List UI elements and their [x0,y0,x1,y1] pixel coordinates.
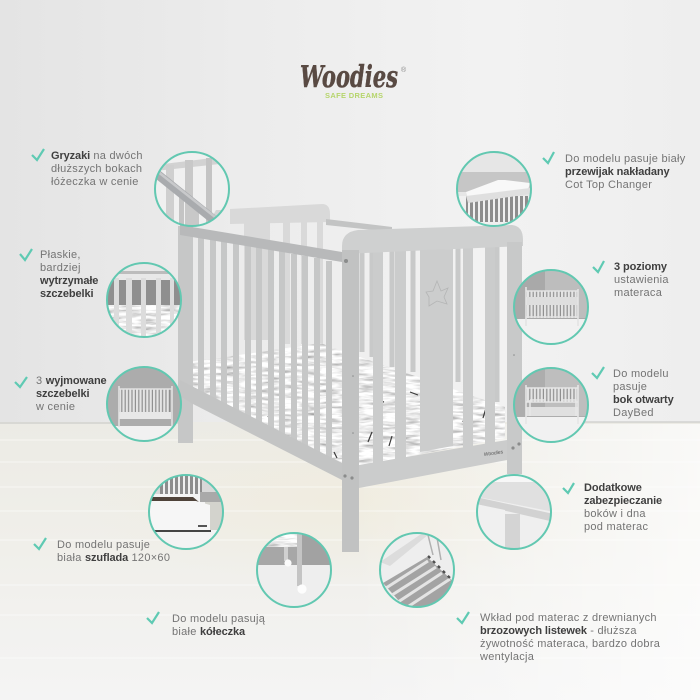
callout: slatted base: brzozowych listewek - dłuższa [480,625,637,637]
detail circle: cot top changer [456,150,534,228]
callout: slatted base: wentylacja [479,651,535,663]
crib: head end slats [373,247,495,475]
crib: small brand mark: Woodies [483,449,504,458]
callout: mattress levels [593,261,669,299]
callout: mattress levels: 3 poziomy [614,261,668,273]
callout: mattress levels: ustawienia [614,274,669,286]
callout: removable slats: 3 wyjmowane [36,375,107,387]
callout: drawer [34,538,170,564]
crib: long side slats [190,233,329,460]
logo [300,60,407,100]
crib: back headboard [230,204,330,344]
callout: reinforcement: Dodatkowe [584,482,642,494]
crib illustration [178,204,523,552]
callout: Gryzaki: łóżeczka w cenie [51,176,139,188]
crib: head top panel [342,225,523,254]
callout: changer [543,152,686,191]
callout: reinforcement: pod materac [584,521,648,533]
crib: star [426,281,448,306]
callout: Gryzaki: dłuższych bokach [51,163,142,175]
logo: Woodies [300,60,398,95]
callout: flat slats: szczebelki [40,288,93,300]
crib: long top rail [180,225,342,262]
logo: ® [401,66,407,74]
callout: flat slats: bardziej [40,262,81,274]
crib: screws [343,259,521,480]
background: floor [0,415,700,700]
detail circle: side and base reinforcement [476,474,554,552]
crib: back long side slats [362,232,497,402]
detail circle: castor wheels [256,532,334,608]
callout: removable slats: w cenie [35,401,75,413]
detail circle: removable slats [105,366,183,444]
callout: removable slats: szczebelki [36,388,89,400]
callout: castors [147,612,266,638]
callout: slatted base: żywotność materaca, bardzo dobra [480,638,661,650]
callout: mattress levels: materaca [614,287,663,299]
callout: flat slats [20,249,98,300]
callout: changer: przewijak nakładany [565,166,670,178]
callout: changer: Do modelu pasuje biały [565,153,686,165]
callout: reinforcement: boków i dna [584,508,646,520]
callout: reinforcement [563,482,662,533]
crib: right post [507,242,522,474]
callout: castors: białe kółeczka [172,626,246,638]
detail circle: daybed side [513,366,591,444]
callout: daybed: DayBed [613,407,654,419]
detail circle: side rail teething guard [155,152,230,230]
logo: SAFE DREAMS [325,91,383,100]
crib: mattress [193,343,505,465]
crib: long bottom rail [180,380,342,480]
callout: drawer: biała szuflada 120×60 [57,552,170,564]
callout: reinforcement: zabezpieczanie [584,495,662,507]
callout: Gryzaki [32,149,143,188]
background: wall [0,0,700,424]
callout: Gryzaki: Gryzaki na dwóch [51,150,143,162]
detail circle: birch slatted base [378,530,456,610]
callout: daybed: pasuje [613,381,647,393]
crib: front post [342,250,359,552]
detail circle: flat slats [105,262,183,339]
callout: castors: Do modelu pasują [172,613,266,625]
callout: daybed [592,367,675,419]
callout: daybed: Do modelu [613,368,669,380]
crib: star panel [420,249,453,452]
crib: head bottom rail [359,440,507,488]
callout: flat slats: Płaskie, [40,249,81,261]
callout: drawer: Do modelu pasuje [57,539,150,551]
callout: slatted base [457,612,661,663]
crib: back long rail [326,219,392,232]
callout: daybed: bok otwarty [613,394,675,406]
callout: removable slats [15,375,107,413]
detail circle: drawer [148,474,226,550]
callout: changer: Cot Top Changer [565,179,652,191]
detail circle: three mattress levels [513,268,591,346]
callout: flat slats: wytrzymałe [39,275,98,287]
crib: left leg [178,226,193,443]
callout: slatted base: Wkład pod materac z drewnianych [480,612,657,624]
